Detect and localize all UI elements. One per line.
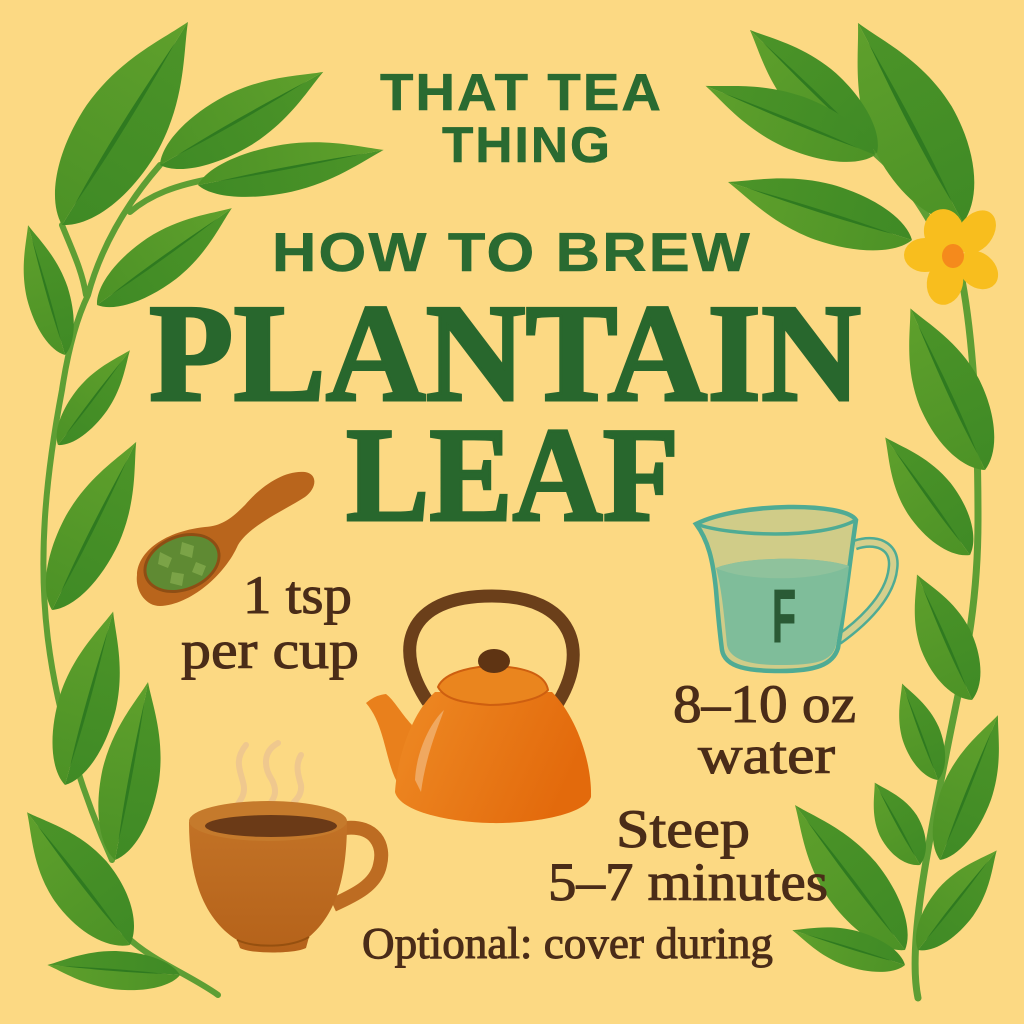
label: steep time: Steep: [616, 799, 750, 859]
leaf: [901, 837, 1014, 964]
leaf: [917, 706, 1021, 869]
label: steep time: [548, 799, 828, 912]
label: water amount: 8–10 oz: [673, 674, 856, 734]
icon: tea cup: [189, 801, 381, 952]
leaf: [46, 946, 181, 994]
leaf: [87, 677, 176, 865]
leaf: [856, 772, 939, 875]
leaf: [25, 429, 163, 623]
main heading: PLANTAIN: [149, 276, 861, 431]
main heading: LEAF: [346, 401, 679, 550]
title: brand: THAT TEA: [380, 64, 663, 122]
label: water amount: water: [698, 725, 835, 785]
subtitle: HOW TO BREW: [272, 221, 752, 283]
leaf: [8, 219, 85, 361]
stem: left vine: [43, 165, 218, 995]
leaf: [719, 154, 921, 268]
leaf: [1, 792, 156, 965]
icon: yellow flower: [904, 203, 1006, 308]
label: 1 tsp per cup: 1 tsp: [243, 565, 352, 625]
leaf: [819, 2, 1002, 244]
title: brand: [380, 64, 663, 173]
leaf: [194, 126, 388, 209]
label: 1 tsp per cup: per cup: [181, 620, 359, 680]
icon: wooden spoon: [134, 472, 314, 606]
leaf: [864, 422, 991, 570]
leaf: [881, 295, 1015, 484]
leaf: [884, 677, 956, 787]
leaf: [43, 339, 145, 456]
leaf: [37, 604, 141, 793]
icon: steam: [238, 743, 301, 804]
leaf: [146, 48, 337, 189]
label: steep time: 5–7 minutes: [548, 852, 828, 912]
right vine: [695, 2, 1021, 998]
stem: right vine: [875, 153, 978, 998]
label: optional note: Optional: cover during: [362, 919, 773, 968]
leaf: [730, 9, 897, 174]
leaf: [82, 188, 246, 325]
leaf: [26, 0, 224, 247]
icon: measuring cup: F: [772, 574, 796, 658]
left vine: [1, 0, 388, 995]
main heading: [149, 276, 861, 550]
leaf: [787, 913, 910, 982]
icon: measuring cup: [696, 507, 893, 671]
label: water amount: [673, 674, 856, 785]
leaf: [695, 61, 885, 180]
leaf: [893, 564, 996, 711]
icon: kettle: [366, 596, 591, 823]
label: 1 tsp per cup: [181, 565, 359, 680]
leaf: [771, 787, 929, 968]
title: brand: THING: [442, 117, 612, 173]
